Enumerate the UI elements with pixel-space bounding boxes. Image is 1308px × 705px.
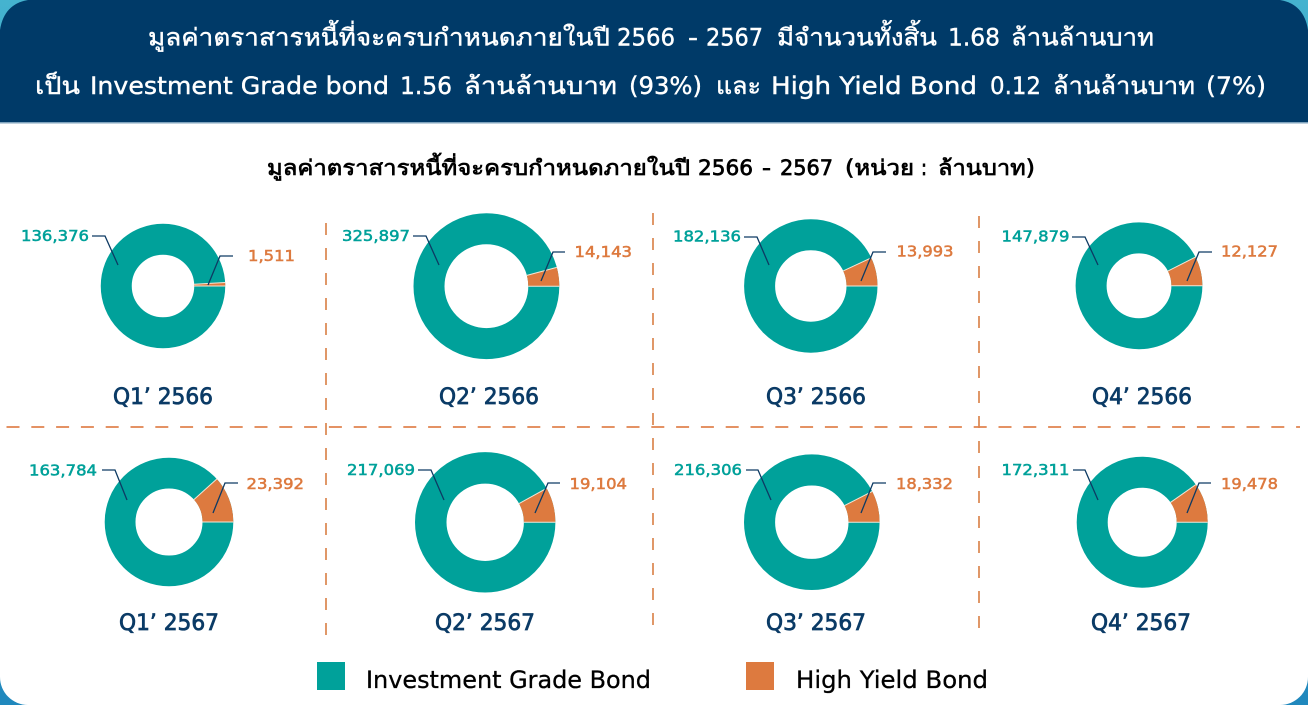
donut: Q1 2566: 1,511 <box>248 247 295 265</box>
donut: Q2 2567: Q2’ 2567 <box>435 611 535 636</box>
headline line 2: High Yield Bond <box>771 72 977 100</box>
headline line 2: เป็น <box>35 71 80 100</box>
donut: Q2 2566 <box>342 216 632 410</box>
donut: Q2 2566: 325,897 <box>342 227 410 245</box>
headline line 2: Investment Grade bond <box>90 72 389 100</box>
donut: Q4 2567: 172,311 <box>1002 461 1070 479</box>
donut: Q3 2566 <box>673 218 954 410</box>
legend label: High Yield: High Yield Bond <box>796 666 988 694</box>
donut: Q4 2566 <box>1002 221 1278 410</box>
chart title: - <box>762 156 771 180</box>
headline line 1: มีจำนวนทั้งสิ้น <box>777 20 937 52</box>
chart title: (หน่วย <box>845 156 914 180</box>
donut: Q2 2566: Q2’ 2566 <box>439 385 539 410</box>
headline line 2: 0.12 <box>990 72 1041 100</box>
donut: Q1 2567: 163,784 <box>29 462 97 480</box>
headline line 1: มูลค่าตราสารหนี้ที่จะครบกำหนดภายในปี <box>148 20 610 52</box>
chart title: มูลค่าตราสารหนี้ที่จะครบกำหนดภายในปี <box>267 153 690 181</box>
headline line 2: (7%) <box>1206 72 1266 100</box>
headline line 1: 2567 <box>706 24 763 52</box>
donut: Q3 2567: 216,306 <box>674 461 742 479</box>
headline line 2: 1.56 <box>400 72 452 100</box>
dashed grid dividers <box>6 213 1300 636</box>
headline line 2: ล้านล้านบาท <box>464 72 617 100</box>
legend <box>317 662 988 694</box>
headline line 2: (93%) <box>629 72 702 100</box>
donut: Q1 2567: Q1’ 2567 <box>119 611 219 636</box>
donut: Q2 2566: 14,143 <box>574 243 632 261</box>
donut: Q2 2567 <box>347 448 627 636</box>
donut: Q1 2566 <box>21 227 295 410</box>
legend label: Investment Grade: Investment Grade Bond <box>366 666 651 694</box>
headline line 1: ล้านล้านบาท <box>1011 24 1154 52</box>
donut: Q4 2566: Q4’ 2566 <box>1092 385 1192 410</box>
header banner <box>0 0 1308 124</box>
donut: Q4 2567 <box>1002 453 1278 636</box>
donut: Q4 2567: Q4’ 2567 <box>1091 611 1191 636</box>
donut: Q1 2566: 136,376 <box>21 227 89 245</box>
donut: Q2 2567: 19,104 <box>570 475 627 493</box>
donut: Q4 2567: 19,478 <box>1221 475 1278 493</box>
donut: Q2 2567: 217,069 <box>347 461 415 479</box>
legend swatch: Investment Grade <box>317 662 345 690</box>
donut: Q3 2566: 182,136 <box>673 228 741 246</box>
donut: Q3 2567: 18,332 <box>896 475 953 493</box>
chart title: 2567 <box>780 156 833 180</box>
headline line 1: 1.68 <box>948 24 1000 52</box>
donut: Q4 2566: 12,127 <box>1221 243 1278 261</box>
donut: Q1 2566: Q1’ 2566 <box>113 385 213 410</box>
headline line 2: และ <box>716 72 761 100</box>
donut: Q3 2567 <box>674 452 953 636</box>
legend swatch: High Yield <box>746 662 774 690</box>
headline line 2: ล้านล้านบาท <box>1053 72 1195 100</box>
chart title: ล้านบาท) <box>938 156 1035 180</box>
donut: Q3 2566: 13,993 <box>896 243 954 261</box>
donut: Q4 2566: 147,879 <box>1002 228 1070 246</box>
headline line 1: 2566 <box>617 24 675 52</box>
donut: Q1 2567: 23,392 <box>246 475 304 493</box>
chart title: 2566 <box>698 156 753 180</box>
donut: Q1 2567 <box>29 453 304 636</box>
chart title: : <box>921 156 927 180</box>
donut: Q3 2567: Q3’ 2567 <box>766 611 866 636</box>
donut: Q3 2566: Q3’ 2566 <box>766 385 866 410</box>
headline line 1: - <box>688 24 698 52</box>
